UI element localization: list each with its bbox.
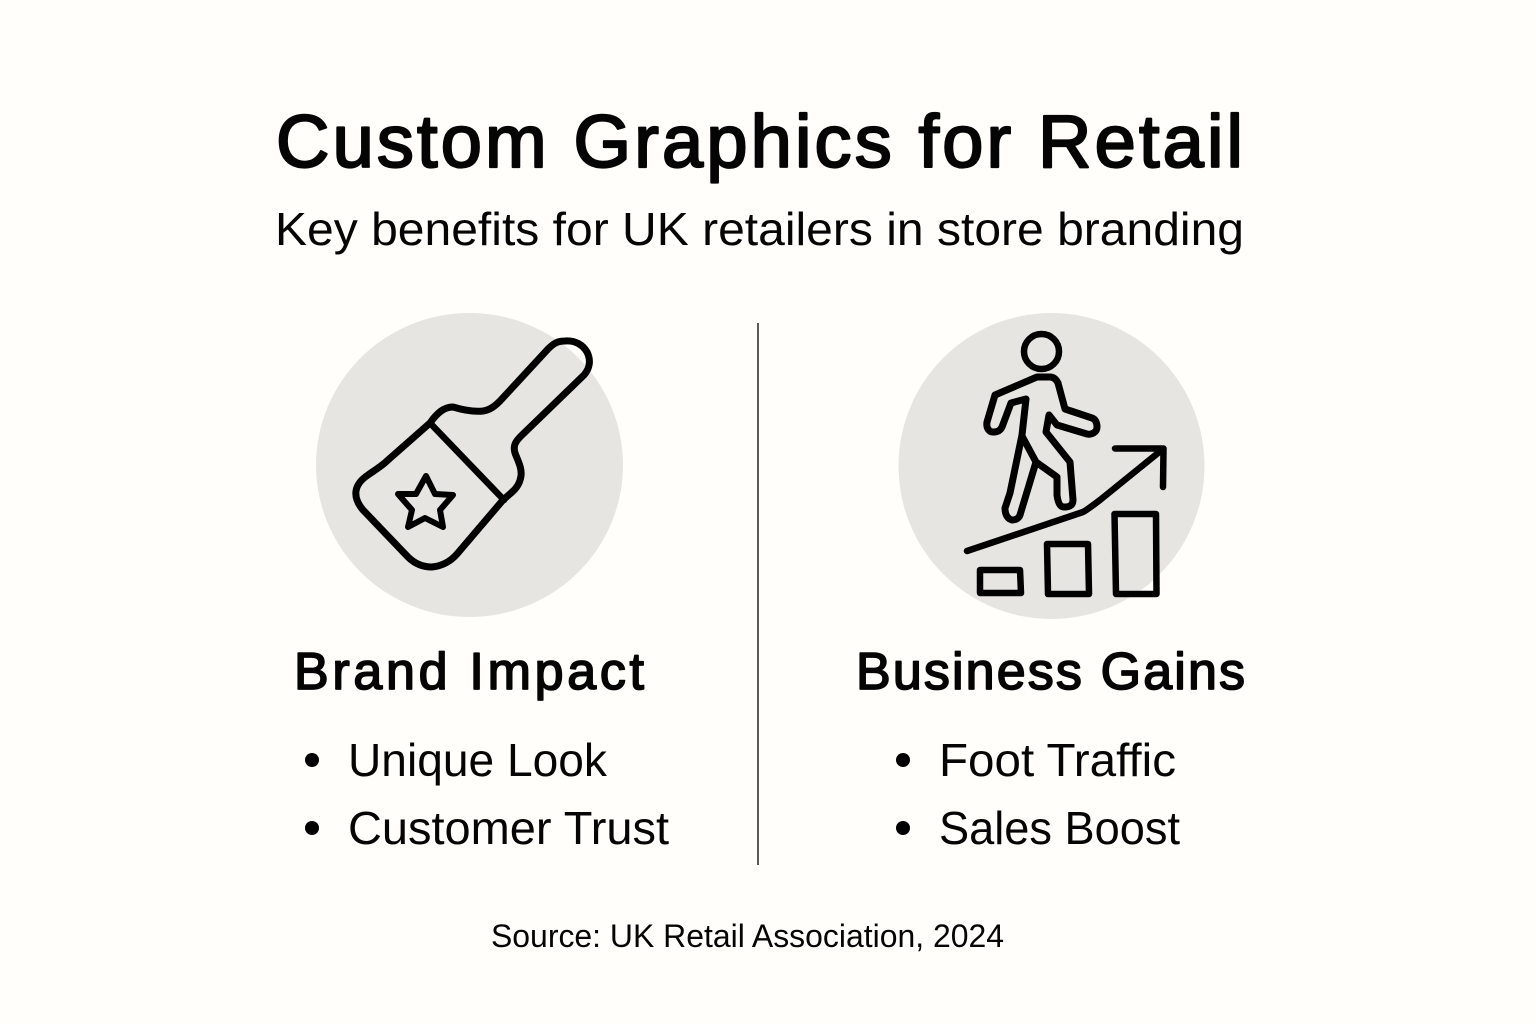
subtitle: Key benefits for UK retailers in store branding [275, 203, 1244, 255]
bullet list: brand impact: Customer Trust [348, 802, 669, 854]
heading: brand impact: Brand Impact [294, 643, 645, 701]
divider [757, 323, 759, 865]
bullet list: brand impact [305, 734, 669, 854]
bullet list: business gains: Sales Boost [939, 802, 1180, 854]
heading: business gains: Business Gains [856, 643, 1245, 701]
panel: brand impact [294, 313, 669, 854]
panel: business gains [856, 313, 1245, 854]
icon: person walking up rising bar chart [898, 313, 1204, 619]
source note: Source: UK Retail Association, 2024 [491, 918, 1004, 954]
icon: paint brush with star [316, 313, 623, 617]
bullet list: business gains: Foot Traffic [939, 734, 1176, 786]
bullet list: brand impact: Unique Look [348, 734, 608, 786]
bullet list: business gains [896, 734, 1180, 854]
title: Custom Graphics for Retail [276, 100, 1243, 183]
